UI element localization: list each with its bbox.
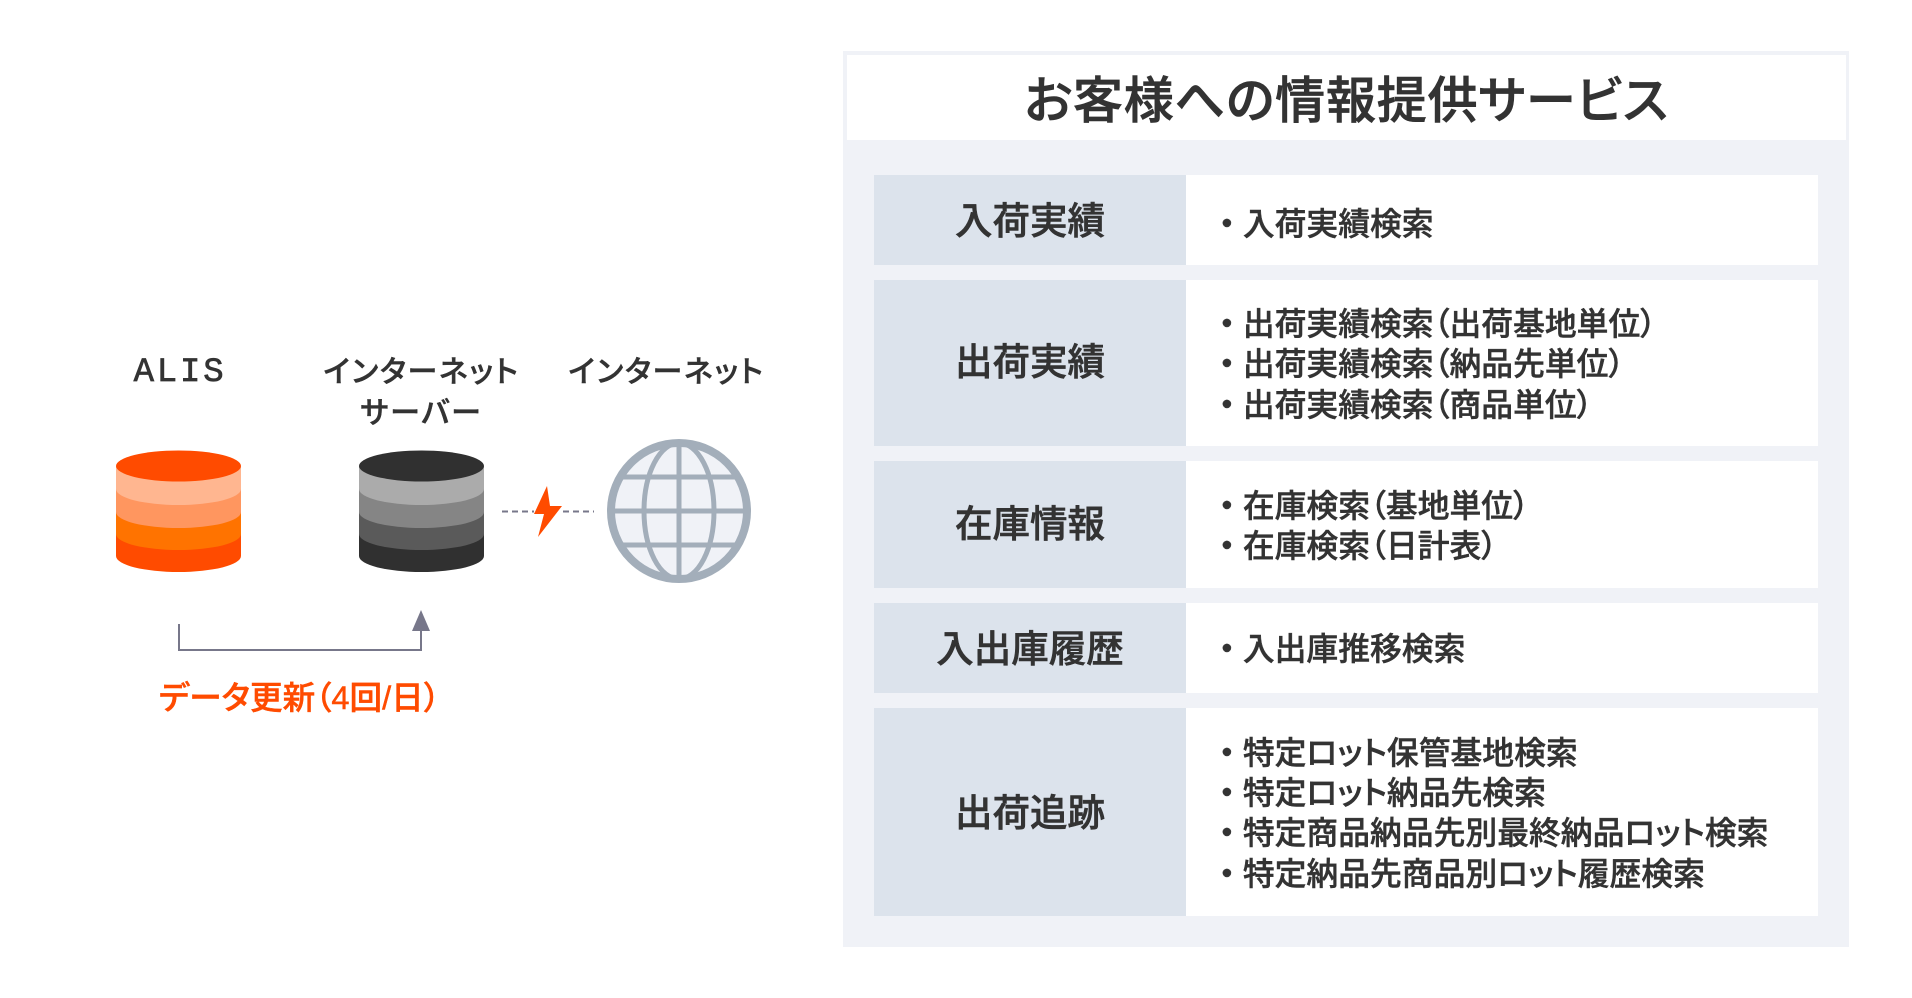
row items: ・入出庫推移検索 [1211, 630, 1465, 666]
label: internet server: インターネット [323, 356, 520, 389]
row label: 入荷実績 [955, 200, 1105, 242]
row: 在庫情報 [874, 461, 1818, 588]
icon: internet server database [359, 450, 484, 572]
row items: ・入荷実績検索 [1211, 206, 1434, 242]
row items: ・特定ロット保管基地検索 [1211, 734, 1578, 770]
arrow: data update from ALIS to internet server [178, 610, 430, 651]
row items [1211, 306, 1656, 423]
row label [874, 280, 1186, 446]
row: 出荷実績 [874, 280, 1818, 446]
label: data update frequency: データ更新（4回/日） [159, 679, 440, 716]
row items: ・特定納品先商品別ロット履歴検索 [1211, 856, 1705, 892]
row label [874, 461, 1186, 588]
label: internet server [323, 356, 520, 430]
row label: 出荷実績 [955, 341, 1105, 383]
row label [874, 175, 1186, 265]
icon: ALIS database [116, 450, 241, 572]
panel: customer information services [843, 51, 1849, 947]
row label [874, 603, 1186, 693]
row items: ・出荷実績検索（納品先単位） [1211, 346, 1624, 382]
panel title [847, 55, 1846, 140]
label: ALIS: ALIS [134, 354, 226, 392]
row: 入荷実績 [874, 175, 1818, 265]
row items [1211, 488, 1529, 564]
row label: 在庫情報 [955, 503, 1105, 545]
icon: globe [607, 439, 751, 583]
label: internet server: サーバー [360, 397, 483, 430]
row label: 出荷追跡 [955, 792, 1105, 834]
panel title: お客様への情報提供サービス [1024, 73, 1669, 129]
row items: ・在庫検索（基地単位） [1211, 488, 1529, 524]
row items: ・在庫検索（日計表） [1211, 528, 1497, 564]
row: 入出庫履歴 [874, 603, 1818, 693]
icon: lightning bolt [534, 486, 562, 537]
connection: dashed line with lightning bolt [502, 486, 594, 537]
row label [874, 708, 1186, 916]
label: internet: インターネット [568, 356, 765, 389]
row items: ・特定ロット納品先検索 [1211, 775, 1546, 811]
row items: ・出荷実績検索（商品単位） [1211, 387, 1593, 423]
row items: ・特定商品納品先別最終納品ロット検索 [1211, 815, 1768, 851]
row label: 入出庫履歴 [936, 628, 1124, 670]
row items [1211, 734, 1768, 892]
row: 出荷追跡 [874, 708, 1818, 916]
row items: ・出荷実績検索（出荷基地単位） [1211, 306, 1656, 342]
